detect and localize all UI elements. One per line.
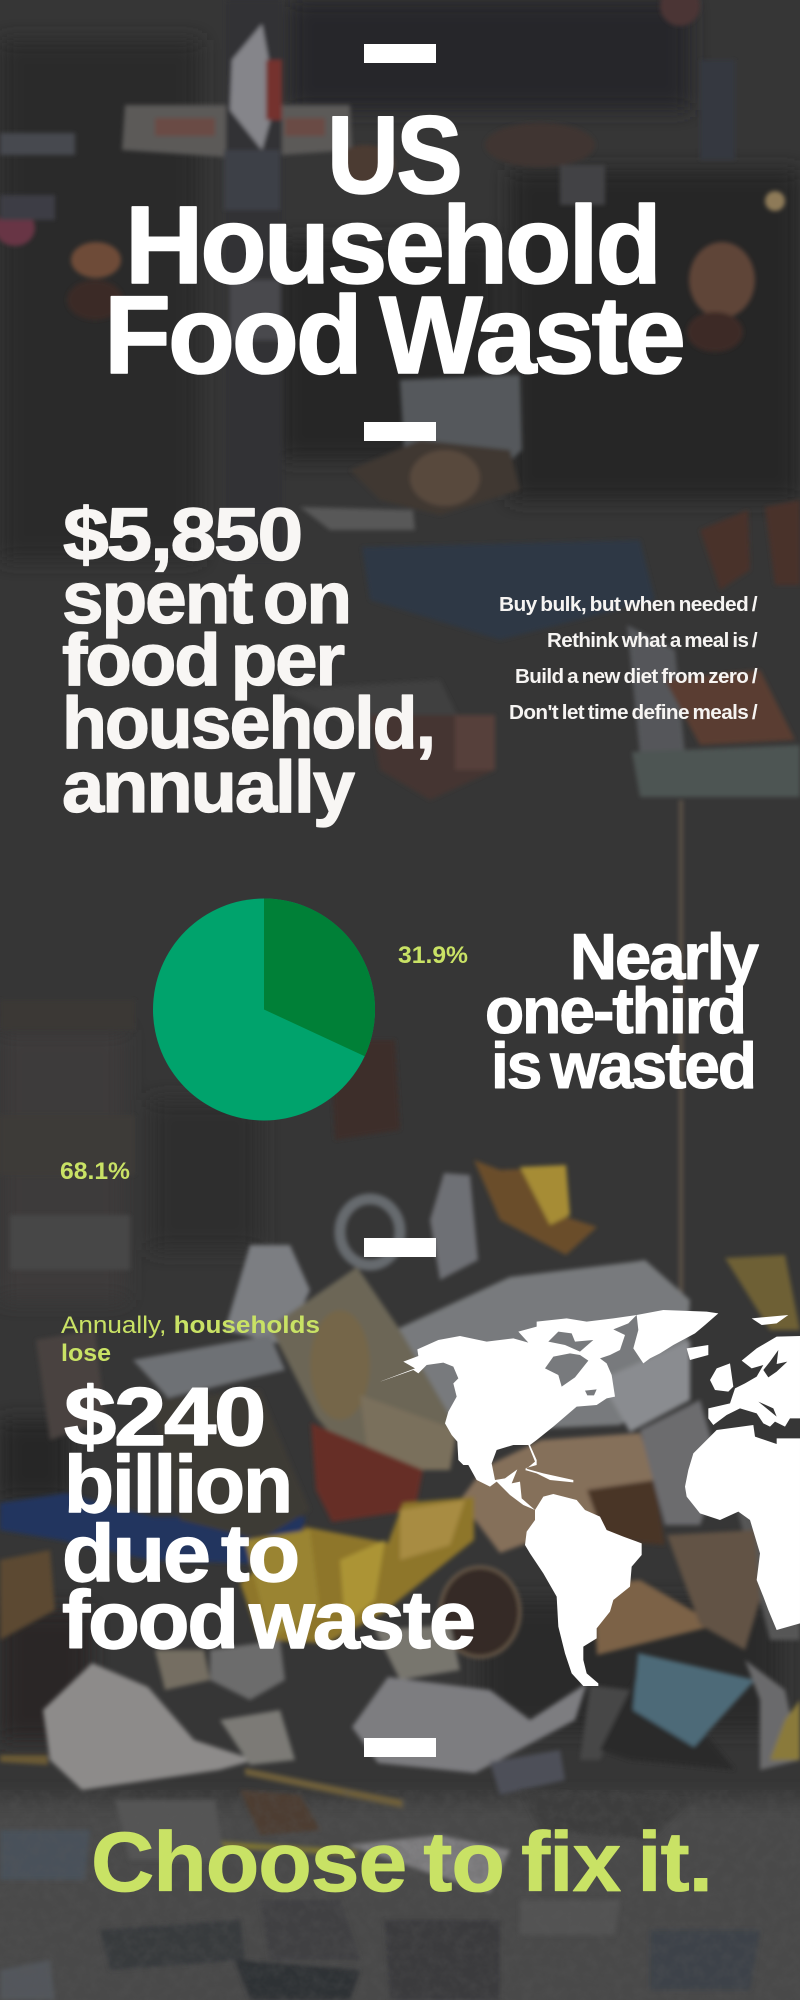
call to action: Choose to fix it. xyxy=(91,1815,712,1909)
loss statistic xyxy=(62,1370,474,1666)
loss statistic: $240 xyxy=(64,1370,264,1463)
spending statistic: annually xyxy=(62,747,355,828)
one-third heading: one-third xyxy=(485,974,745,1047)
spending statistic: spent on xyxy=(62,558,350,639)
one-third heading: Nearly xyxy=(570,920,759,993)
one-third heading xyxy=(485,920,759,1102)
divider bar under title xyxy=(364,422,436,441)
one-third heading: is wasted xyxy=(491,1029,755,1102)
pie chart: share of food wasted xyxy=(153,898,375,1120)
spending statistic: food per xyxy=(62,620,345,701)
loss statistic: due to xyxy=(62,1509,298,1599)
pie label: remaining share: 68.1% xyxy=(60,1158,130,1185)
list of tips: Build a new diet from zero / xyxy=(515,665,758,688)
icon: world map xyxy=(380,1310,800,1686)
title: US xyxy=(327,94,460,217)
loss statistic: billion xyxy=(64,1440,291,1530)
list of tips: Buy bulk, but when needed / xyxy=(499,593,758,616)
list of tips: Don't let time define meals / xyxy=(509,701,758,724)
title: Food Waste xyxy=(104,274,683,397)
spending statistic xyxy=(62,493,434,828)
list of tips xyxy=(499,593,758,724)
top divider bar xyxy=(364,44,436,63)
loss statistic: food waste xyxy=(62,1575,474,1666)
list of tips: Rethink what a meal is / xyxy=(547,629,758,652)
spending statistic: $5,850 xyxy=(63,493,301,576)
title xyxy=(104,94,683,397)
annual loss intro text xyxy=(61,1312,320,1367)
annual loss intro text: lose xyxy=(61,1340,111,1367)
divider bar above call to action xyxy=(364,1738,436,1757)
pie label: wasted share: 31.9% xyxy=(398,942,468,969)
title: Household xyxy=(125,184,659,307)
spending statistic: household, xyxy=(62,683,434,764)
divider bar above loss statistic xyxy=(364,1238,436,1257)
annual loss intro text: Annually, households xyxy=(61,1312,320,1339)
